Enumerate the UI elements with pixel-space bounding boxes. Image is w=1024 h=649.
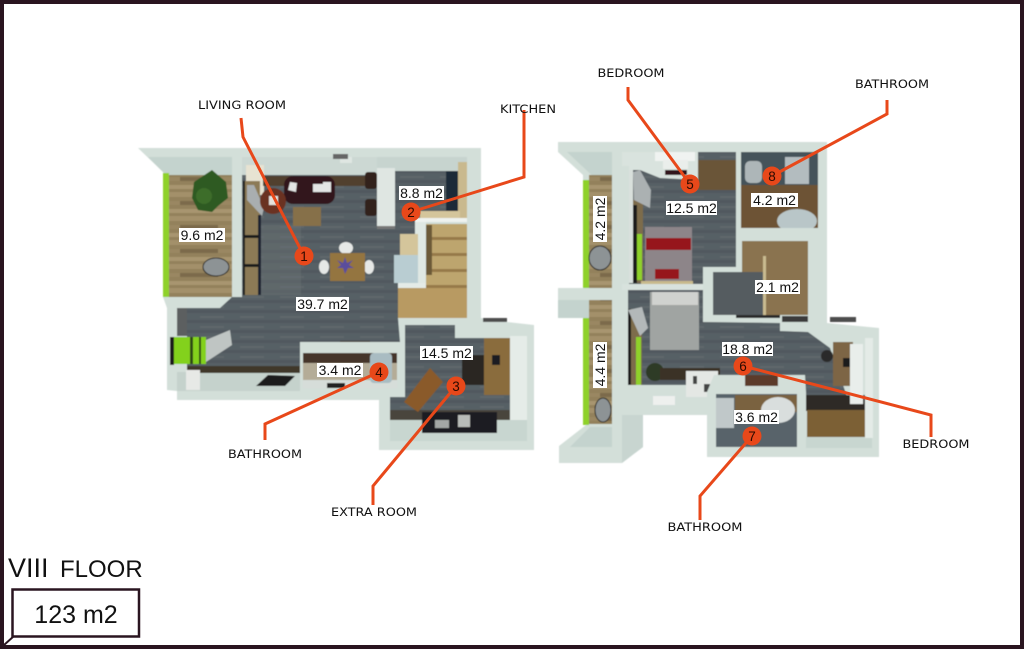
area 12.5: 12.5 m2 (666, 200, 717, 216)
area 3.6: 3.6 m2 (735, 409, 778, 425)
living room floor (187, 154, 467, 372)
side table (260, 188, 286, 214)
coffee table (293, 207, 321, 226)
floor title: FLOOR (60, 556, 143, 583)
total area box: 123 m2 (34, 601, 118, 629)
label: living room: LIVING ROOM (198, 98, 286, 112)
marker 4: 4 (375, 365, 383, 380)
area 39.7: 39.7 m2 (297, 296, 348, 312)
marker 2: 2 (407, 205, 415, 220)
marker 4 (370, 362, 388, 382)
leader 8 (772, 100, 887, 176)
dining table (319, 242, 374, 281)
living room window (243, 181, 301, 295)
marker 1 (294, 246, 314, 266)
sofa (284, 176, 335, 204)
marker 6 (734, 356, 752, 376)
marker 3 (446, 376, 466, 396)
area 14.5: 14.5 m2 (421, 345, 472, 361)
area 18.8: 18.8 m2 (722, 341, 773, 357)
floor title: VIII (8, 553, 49, 583)
floor plan: lower level (138, 148, 534, 450)
stairs (394, 157, 481, 318)
floor plan: upper level (558, 142, 879, 463)
label: bedroom right: BEDROOM (902, 437, 970, 451)
outer walls lower level (138, 148, 534, 450)
upper terraces (558, 152, 643, 463)
area 4.4 terrace: 4.4 m2 (592, 343, 608, 386)
label: extra room: EXTRA ROOM (331, 505, 417, 519)
wall between bedroom and bathroom 8 (736, 152, 741, 240)
leader 3 (373, 386, 456, 505)
area 2.1: 2.1 m2 (756, 279, 799, 295)
marker 5: 5 (686, 177, 694, 192)
marker 8: 8 (768, 169, 776, 184)
area labels (179, 185, 800, 425)
bedroom 6 (622, 284, 850, 415)
bathroom lower level (300, 342, 405, 400)
marker 7 (742, 426, 762, 446)
area 4.2 terrace: 4.2 m2 (592, 197, 608, 240)
leader 2 (411, 110, 524, 212)
marker 7: 7 (748, 429, 756, 444)
kitchen island and units (365, 162, 467, 229)
label: bedroom top: BEDROOM (598, 66, 664, 80)
label: kitchen: KITCHEN (500, 102, 556, 116)
area 9.6: 9.6 m2 (181, 227, 224, 243)
marker 5 (680, 174, 700, 194)
closet (703, 228, 827, 330)
label: bathroom lower: BATHROOM (228, 447, 302, 461)
bathroom 8 (741, 152, 818, 233)
west window and lower wall (170, 308, 370, 391)
wardrobe and desk (806, 317, 873, 448)
bedroom 5 (622, 152, 736, 291)
terrace (148, 157, 232, 297)
area 8.8: 8.8 m2 (400, 185, 443, 201)
leader 1 (241, 118, 304, 256)
outer walls upper level (558, 142, 879, 463)
leader 7 (700, 436, 752, 520)
marker 2 (402, 202, 420, 222)
area 4.2 bathroom: 4.2 m2 (753, 192, 796, 208)
label: bathroom bottom: BATHROOM (668, 520, 742, 534)
label: bathroom top: BATHROOM (855, 77, 929, 91)
total area box (12, 590, 139, 636)
marker 6: 6 (739, 359, 747, 374)
leader 5 (628, 87, 690, 184)
marker 8 (762, 166, 782, 186)
bathroom 7 (707, 375, 806, 457)
marker 3: 3 (452, 379, 460, 394)
area 3.4: 3.4 m2 (319, 362, 362, 378)
marker 1: 1 (300, 249, 308, 264)
leader 4 (265, 372, 379, 440)
extra room (390, 318, 527, 441)
leader 6 (743, 366, 931, 437)
